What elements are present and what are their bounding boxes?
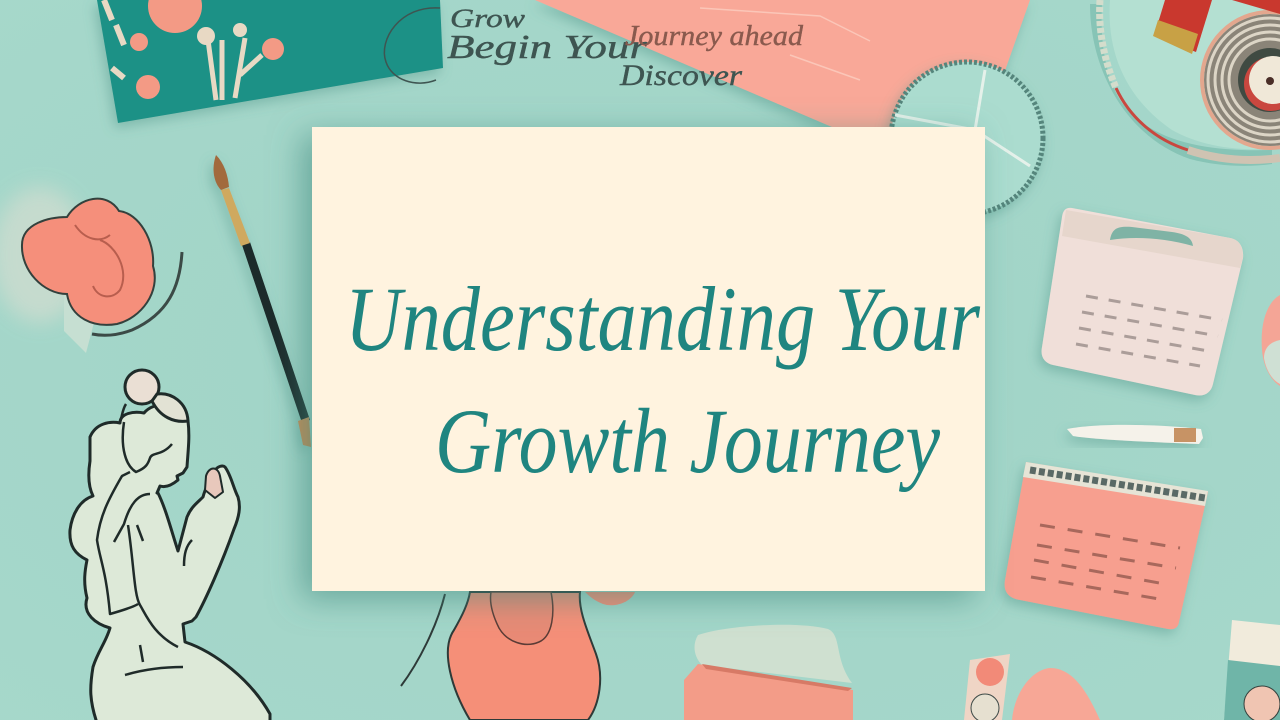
handwriting scribble [384,4,804,92]
icon: coral pod at right edge [1262,295,1280,386]
icon: bottom right keepsakes [964,620,1280,720]
title [345,268,981,492]
teal botanical card [97,0,443,123]
handwriting scribble: Journey ahead [625,21,804,52]
illustration: coral flower [0,187,182,353]
icon: paintbrush [214,155,311,447]
icon: coral open box [684,625,853,720]
title: Understanding Your [345,268,981,370]
icon: coral calendar [1005,462,1208,629]
pink paper sheet [535,0,1030,127]
icon: beige calendar [1041,208,1243,396]
illustration: coral torso [401,592,635,720]
title: Growth Journey [435,390,940,492]
handwriting scribble: Discover [619,59,742,92]
icon: measuring tape [1090,0,1280,166]
icon: round dial [891,62,1043,214]
title card [312,127,985,591]
handwriting scribble: Grow [450,4,526,33]
illustration: woman figure [70,370,270,720]
handwriting scribble: Begin Your [447,29,648,66]
icon: white tube [1067,425,1203,444]
